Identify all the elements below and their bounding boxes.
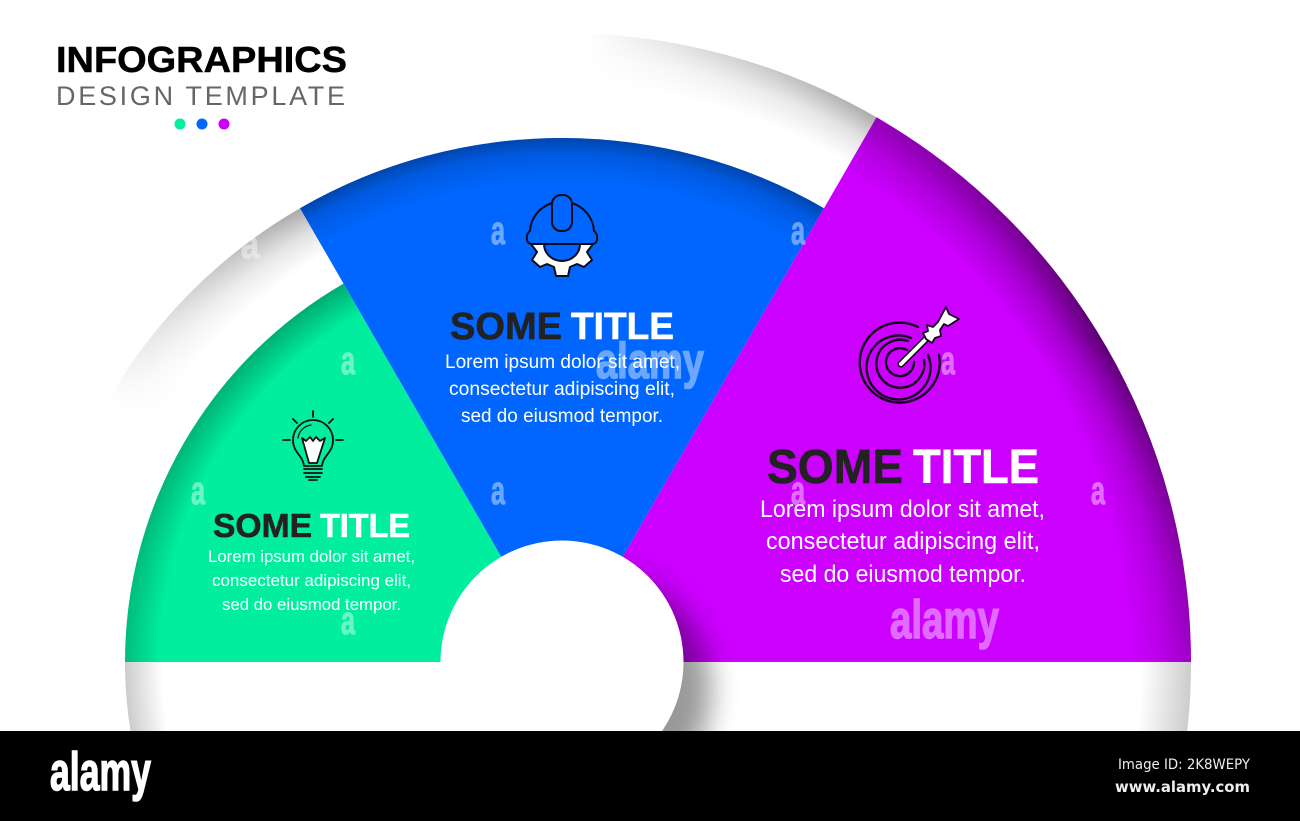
blue title: TITLE: [571, 306, 674, 348]
heading: infographics: INFOGRAPHICS: [56, 39, 347, 80]
decorative dots: [174, 118, 230, 130]
green body: sed do eiusmod tempor.: [222, 595, 401, 614]
blue body: sed do eiusmod tempor.: [461, 405, 663, 427]
green title: SOME: [213, 507, 312, 544]
watermark overlays: a: [1091, 469, 1105, 513]
text block: blue panel: [445, 306, 680, 427]
footer url: www.alamy.com: [1115, 778, 1250, 796]
blue body: consectetur adipiscing elit,: [449, 378, 675, 400]
purple title: TITLE: [913, 441, 1039, 494]
purple body: [760, 496, 1045, 588]
icon: target with arrow: [860, 307, 959, 403]
purple body: consectetur adipiscing elit,: [766, 528, 1040, 555]
centre white circle: [440, 540, 684, 784]
panel: green segment: [125, 284, 502, 662]
bottom band shadow: left: [125, 662, 175, 731]
green body: Lorem ipsum dolor sit amet,: [208, 547, 415, 566]
watermark overlays: a: [241, 223, 260, 267]
text block: green panel: [208, 507, 415, 614]
green body: [208, 547, 415, 614]
watermark overlays: alamy: [596, 333, 704, 389]
purple body: sed do eiusmod tempor.: [780, 561, 1026, 588]
watermark overlays: a: [491, 469, 505, 513]
centre circle shadow: [620, 554, 728, 731]
watermark overlays: a: [791, 469, 805, 513]
green title: TITLE: [320, 507, 410, 544]
watermark overlays: a: [791, 209, 805, 253]
bottom band shadow: right: [1130, 662, 1191, 731]
outer ring shadow: left: [124, 208, 322, 376]
purple title: SOME: [767, 441, 903, 494]
image id: Image ID: 2K8WEPY: [1118, 757, 1250, 773]
watermark overlays: a: [491, 209, 505, 253]
watermark overlays: a: [191, 469, 205, 513]
watermark overlays: a: [941, 339, 955, 383]
watermark overlays: alamy: [890, 590, 999, 650]
watermark overlays: a: [341, 599, 355, 643]
blue title: SOME: [450, 306, 562, 348]
purple body: Lorem ipsum dolor sit amet,: [760, 496, 1045, 523]
text block: purple panel: [760, 441, 1045, 588]
watermark overlays: [191, 209, 1105, 650]
green body: consectetur adipiscing elit,: [212, 571, 411, 590]
footer bar: [0, 731, 1300, 821]
title block: [56, 39, 347, 130]
outer ring shadow: top: [614, 36, 876, 156]
panel: purple segment: [562, 117, 1191, 662]
footer logo: alamy: [50, 742, 151, 802]
watermark overlays: a: [341, 339, 355, 383]
icon: helmet with gear: [527, 195, 597, 276]
panel: blue segment: [300, 138, 824, 662]
subheading: design template: DESIGN TEMPLATE: [56, 81, 345, 111]
icon: light bulb: [283, 411, 343, 480]
blue body: Lorem ipsum dolor sit amet,: [445, 351, 680, 373]
blue body: [445, 351, 680, 427]
